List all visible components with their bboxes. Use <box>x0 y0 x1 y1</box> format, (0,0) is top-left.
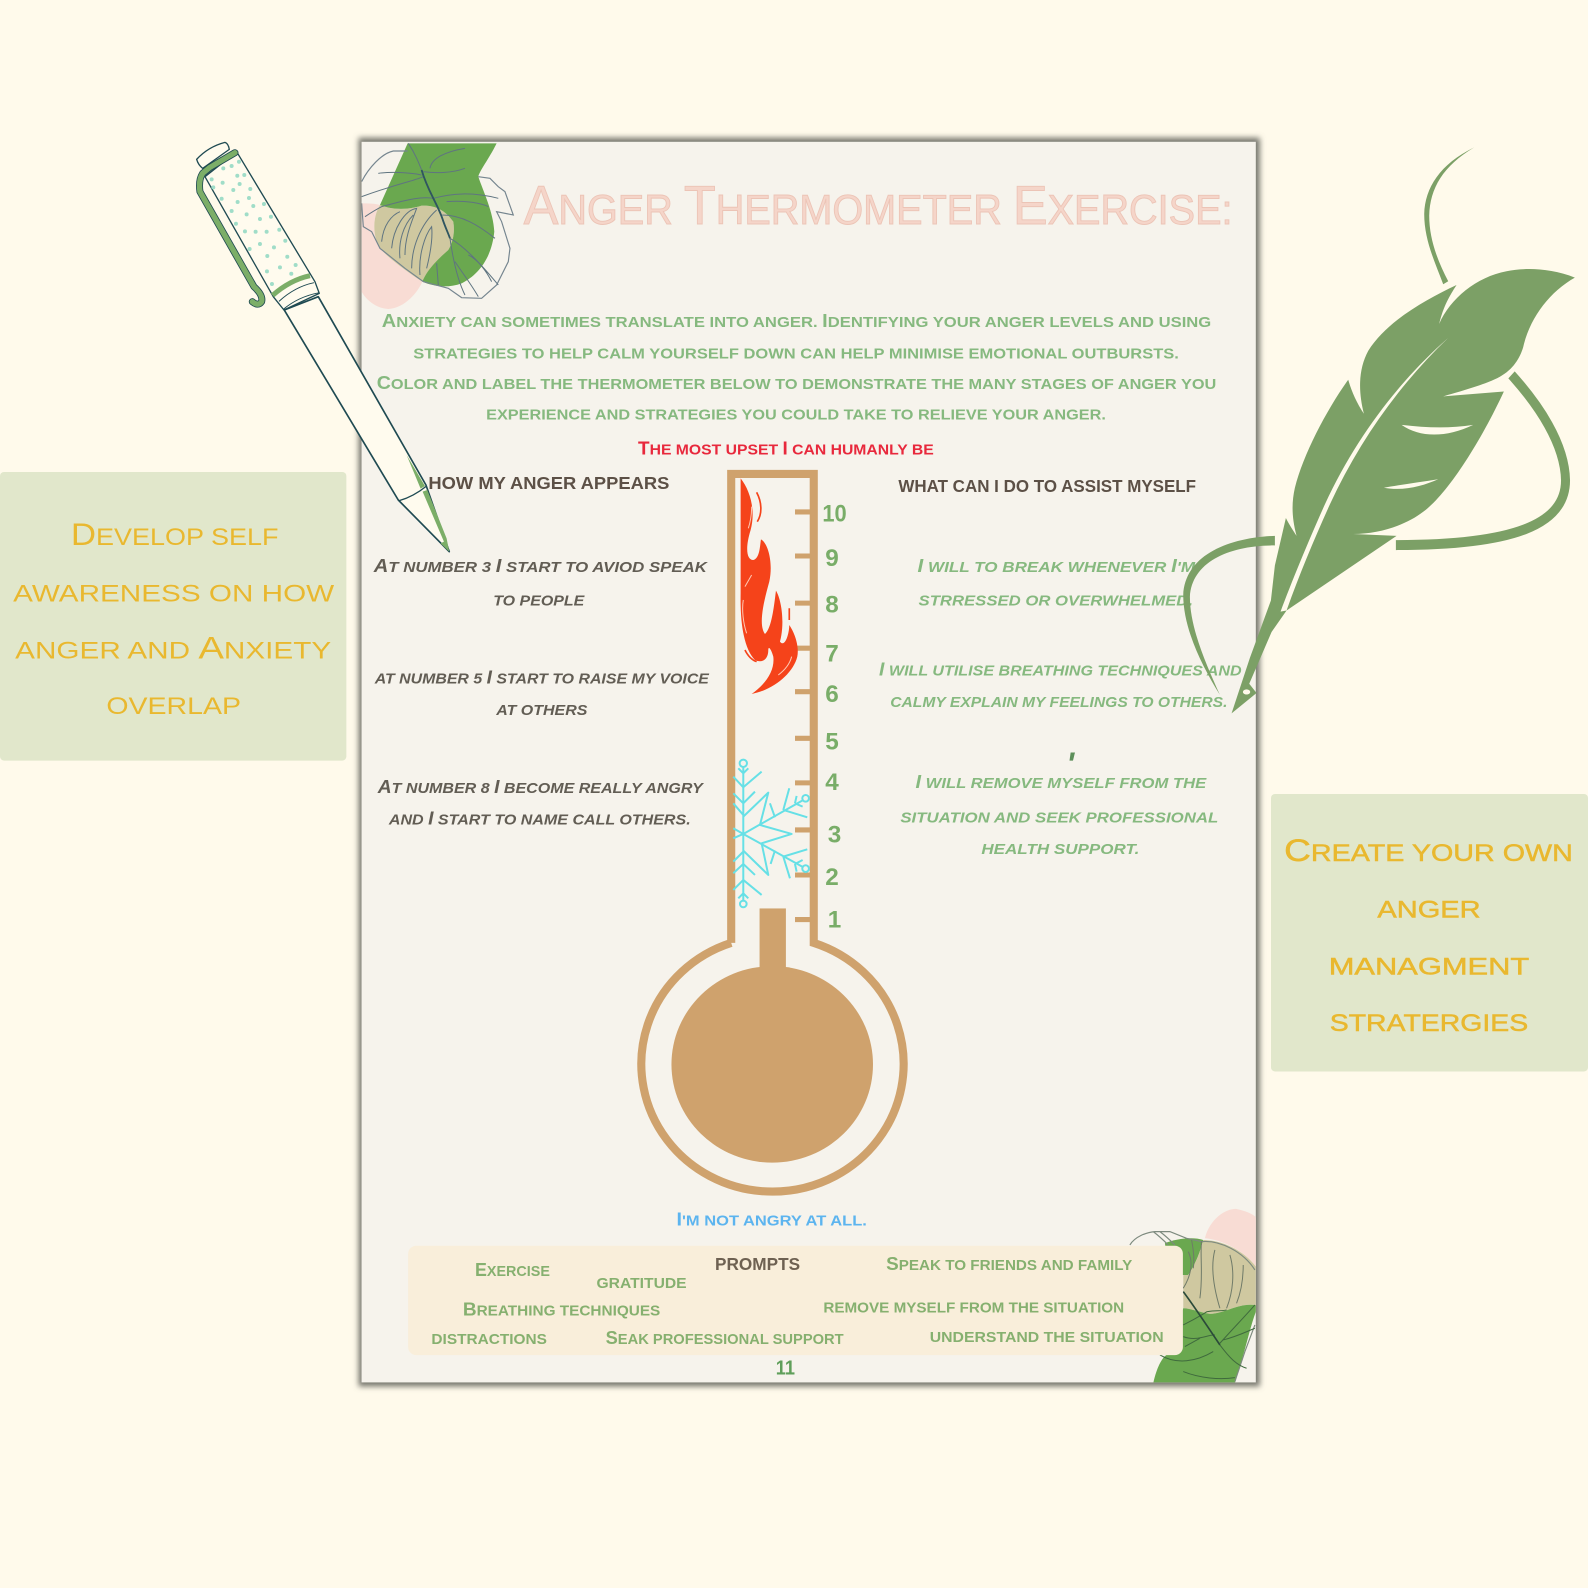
label: top of scale: THE MOST UPSET I CAN HUMANLY BE <box>638 439 934 459</box>
right column: strategies <box>879 556 1242 858</box>
callout: right <box>1271 794 1588 1071</box>
scale numbers: 5 <box>825 728 839 755</box>
scale numbers: 8 <box>825 592 839 619</box>
callout: right: CREATE YOUR OWN <box>1284 833 1573 868</box>
intro paragraph: STRATEGIES TO HELP CALM YOURSELF DOWN CAN HELP MINIMISE EMOTIONAL OUTBURSTS. <box>413 346 1179 363</box>
panel: prompts: EXERCISE <box>475 1260 550 1280</box>
chart: thermometer <box>641 474 904 1192</box>
column heading: how my anger appears: HOW MY ANGER APPEARS <box>428 473 669 493</box>
panel: prompts: PROMPTS <box>715 1254 800 1274</box>
panel: worksheet page <box>359 138 1260 1386</box>
page number: 11 <box>776 1357 795 1379</box>
illustration: bottom-right monstera leaf <box>1130 1209 1258 1383</box>
callout: left: OVERLAP <box>106 693 241 720</box>
right column: strategies: CALMY EXPLAIN MY FEELINGS TO OTHERS. <box>890 694 1227 711</box>
column heading: what can I do: WHAT CAN I DO TO ASSIST MYSELF <box>898 476 1196 496</box>
callout: right: STRATERGIES <box>1330 1010 1528 1037</box>
panel: prompts: UNDERSTAND THE SITUATION <box>930 1330 1164 1346</box>
scale numbers: 10 <box>822 501 847 528</box>
illustration: top-left monstera leaf <box>362 143 513 309</box>
panel: prompts: BREATHING TECHNIQUES <box>463 1300 661 1320</box>
panel: prompts: DISTRACTIONS <box>431 1332 547 1348</box>
scale ticks <box>795 512 810 920</box>
panel: prompts: GRATITUDE <box>597 1276 687 1292</box>
icon: flame <box>741 478 798 694</box>
label: bottom of scale: I'M NOT ANGRY AT ALL. <box>677 1209 867 1229</box>
illustration: pen <box>197 142 449 552</box>
left column: anger examples: AND I START TO NAME CALL OTHERS. <box>388 808 691 828</box>
callout: left: ANGER AND ANXIETY <box>15 630 331 665</box>
panel: prompts <box>408 1246 1183 1355</box>
callout: right: ANGER <box>1377 897 1481 924</box>
callout: left: DEVELOP SELF <box>71 517 279 552</box>
left column: anger examples: AT NUMBER 5 I START TO RAISE MY VOICE <box>374 668 710 688</box>
callout: left <box>0 472 346 761</box>
intro paragraph: EXPERIENCE AND STRATEGIES YOU COULD TAKE TO RELIEVE YOUR ANGER. <box>486 406 1106 423</box>
left column: anger examples <box>373 556 710 828</box>
right column: strategies: SITUATION AND SEEK PROFESSIONAL <box>900 809 1218 826</box>
panel: prompts: REMOVE MYSELF FROM THE SITUATION <box>823 1301 1124 1317</box>
scale numbers <box>822 501 847 934</box>
left column: anger examples: TO PEOPLE <box>493 593 585 610</box>
intro paragraph <box>377 311 1216 423</box>
scale numbers: 6 <box>825 681 839 708</box>
scale numbers: 3 <box>828 822 841 849</box>
left column: anger examples: AT OTHERS <box>495 702 587 719</box>
right column: strategies: I WILL TO BREAK WHENEVER I'M <box>918 556 1195 576</box>
right column: strategies: I WILL UTILISE BREATHING TECHNIQUES AND <box>879 660 1242 680</box>
panel: prompts: SEAK PROFESSIONAL SUPPORT <box>606 1328 844 1348</box>
left column: anger examples: AT NUMBER 3 I START TO AVIOD SPEAK <box>373 556 708 576</box>
left column: anger examples: AT NUMBER 8 I BECOME REALLY ANGRY <box>377 777 705 797</box>
scale numbers: 9 <box>825 545 839 572</box>
callout: right: MANAGMENT <box>1329 953 1529 980</box>
callout: left: AWARENESS ON HOW <box>13 581 334 608</box>
intro paragraph: ANXIETY CAN SOMETIMES TRANSLATE INTO ANGER. IDENTIFYING YOUR ANGER LEVELS AND USING <box>382 311 1211 331</box>
panel: prompts: SPEAK TO FRIENDS AND FAMILY <box>886 1254 1132 1274</box>
right column: strategies: I WILL REMOVE MYSELF FROM THE <box>916 772 1207 792</box>
icon: snowflake <box>733 760 809 907</box>
thermometer outline <box>641 474 904 1192</box>
right column: strategies: STRRESSED OR OVERWHELMED. <box>919 593 1193 610</box>
thermometer bulb <box>671 908 873 1163</box>
intro paragraph: COLOR AND LABEL THE THERMOMETER BELOW TO DEMONSTRATE THE MANY STAGES OF ANGER YOU <box>377 373 1216 393</box>
right column: strategies: ' <box>1066 746 1075 782</box>
illustration: feather quill <box>1183 147 1575 713</box>
scale numbers: 4 <box>825 769 839 796</box>
scale numbers: 2 <box>825 864 839 891</box>
title: ANGER THERMOMETER EXERCISE: <box>524 174 1233 236</box>
scale numbers: 1 <box>828 907 841 934</box>
scale numbers: 7 <box>825 640 839 667</box>
right column: strategies: HEALTH SUPPORT. <box>981 841 1139 858</box>
